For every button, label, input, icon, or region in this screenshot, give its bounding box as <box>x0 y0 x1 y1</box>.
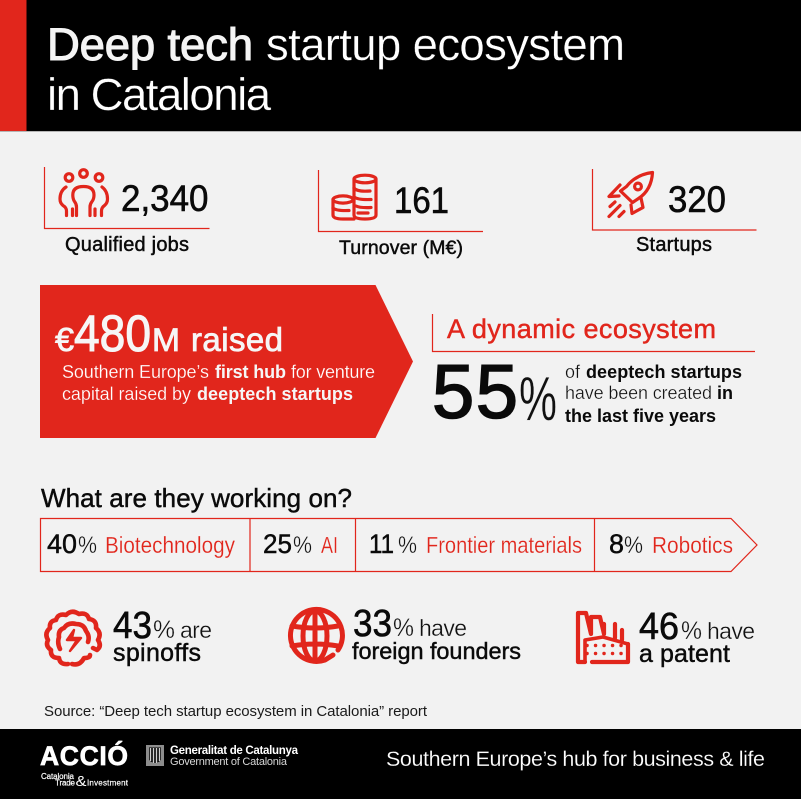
stat: turnover <box>318 170 483 259</box>
Generalitat de Catalunya wordmark: Government of Catalonia <box>170 756 288 768</box>
stat: spinoffs: 43 <box>113 605 152 647</box>
header banner <box>0 0 801 132</box>
sector: robotics <box>609 529 733 559</box>
logo: ACCIO: Investment <box>87 778 129 788</box>
sector: biotechnology: Biotechnology <box>105 532 235 558</box>
sector: biotechnology <box>47 529 235 559</box>
stat: foreign founders: have <box>419 615 467 641</box>
sector: AI: 25 <box>263 529 292 559</box>
icon: factory <box>578 613 628 662</box>
funding headline: raised <box>191 321 283 358</box>
funding description <box>62 362 375 404</box>
sector: biotechnology: 40 <box>47 529 77 559</box>
logo: Generalitat shield <box>146 745 164 766</box>
stat: foreign founders: 33 <box>353 603 392 645</box>
stat: turnover: Turnover (M€) <box>339 237 463 259</box>
panel: dynamic ecosystem: A dynamic ecosystem <box>447 314 716 344</box>
funding headline: € <box>55 321 74 358</box>
55 percent figure: % <box>519 365 557 434</box>
stat: qualified jobs <box>44 167 210 256</box>
Generalitat de Catalunya wordmark <box>170 745 299 768</box>
sector: frontier materials: 11 <box>369 529 394 559</box>
ecosystem description: in <box>717 383 733 403</box>
stat: spinoffs <box>46 605 212 667</box>
stat: startups: 320 <box>668 179 726 220</box>
sector: frontier materials <box>369 529 582 559</box>
logo: ACCIO <box>40 741 129 790</box>
logo: ACCIO: Trade <box>55 778 76 788</box>
source note: Source: “Deep tech startup ecosystem in Catalonia” report <box>44 703 428 720</box>
funding description: capital raised by <box>62 384 191 404</box>
panel: funding arrow <box>40 285 413 438</box>
stat: foreign founders: foreign founders <box>352 638 521 664</box>
stat: patent: have <box>707 618 755 644</box>
ecosystem description: deeptech startups <box>586 362 742 382</box>
funding description: deeptech startups <box>197 384 353 404</box>
stat: patent: a patent <box>639 640 730 668</box>
logo: ACCIO: Catalonia <box>41 772 75 781</box>
funding description: for venture <box>291 362 375 382</box>
stat: qualified jobs: 2,340 <box>121 178 208 219</box>
stat: patent: 46 <box>639 606 679 648</box>
stat: foreign founders <box>290 603 521 664</box>
stat: spinoffs: spinoffs <box>113 639 201 667</box>
stat: patent <box>578 606 755 668</box>
sector: AI: AI <box>321 532 338 558</box>
icon: globe <box>290 609 342 661</box>
title <box>47 19 625 120</box>
logo: ACCIO: & <box>76 773 86 790</box>
funding headline: M <box>152 322 180 358</box>
funding headline <box>55 305 283 362</box>
sector: AI: % <box>293 532 312 559</box>
tagline: Southern Europe’s hub for business & life <box>386 747 765 771</box>
55 percent figure: 55 <box>432 350 518 435</box>
ecosystem description: of <box>565 362 581 382</box>
logo: ACCIO: ACCIÓ <box>40 741 128 771</box>
title: Deep tech <box>47 19 253 70</box>
55 percent figure <box>432 350 557 435</box>
stat: patent: % <box>681 617 702 645</box>
footer bar <box>0 729 801 799</box>
funding description: Southern Europe’s <box>62 362 209 382</box>
sector: robotics: Robotics <box>652 532 733 558</box>
Generalitat de Catalunya wordmark: Generalitat de Catalunya <box>170 745 299 757</box>
stat: turnover: 161 <box>394 180 449 221</box>
sector: robotics: % <box>624 532 643 559</box>
sector: frontier materials: % <box>398 532 417 559</box>
icon: coins <box>333 175 376 219</box>
stat: spinoffs: % <box>153 616 175 644</box>
sector breakdown arrow <box>40 518 757 572</box>
icon: people <box>60 170 108 216</box>
stat: qualified jobs: Qualified jobs <box>65 234 189 256</box>
stat: spinoffs: are <box>180 617 212 643</box>
funding description: first hub <box>215 362 286 382</box>
icon: rocket <box>609 172 652 216</box>
title: startup ecosystem <box>266 19 625 70</box>
funding headline: 480 <box>74 305 151 362</box>
sector: AI <box>263 529 338 559</box>
icon: brain with lightning <box>46 612 100 664</box>
sector: frontier materials: Frontier materials <box>426 532 582 558</box>
sector: robotics: 8 <box>609 529 624 559</box>
stat: startups <box>592 169 756 256</box>
ecosystem description: the last five years <box>565 406 716 426</box>
heading: what are they working on: What are they working on? <box>41 483 352 513</box>
panel: dynamic ecosystem <box>432 314 755 435</box>
title: in Catalonia <box>47 69 272 120</box>
ecosystem description <box>565 362 742 426</box>
ecosystem description: have been created <box>565 383 712 403</box>
stat: foreign founders: % <box>393 614 414 642</box>
sector: biotechnology: % <box>78 532 97 559</box>
stat: startups: Startups <box>636 234 712 256</box>
